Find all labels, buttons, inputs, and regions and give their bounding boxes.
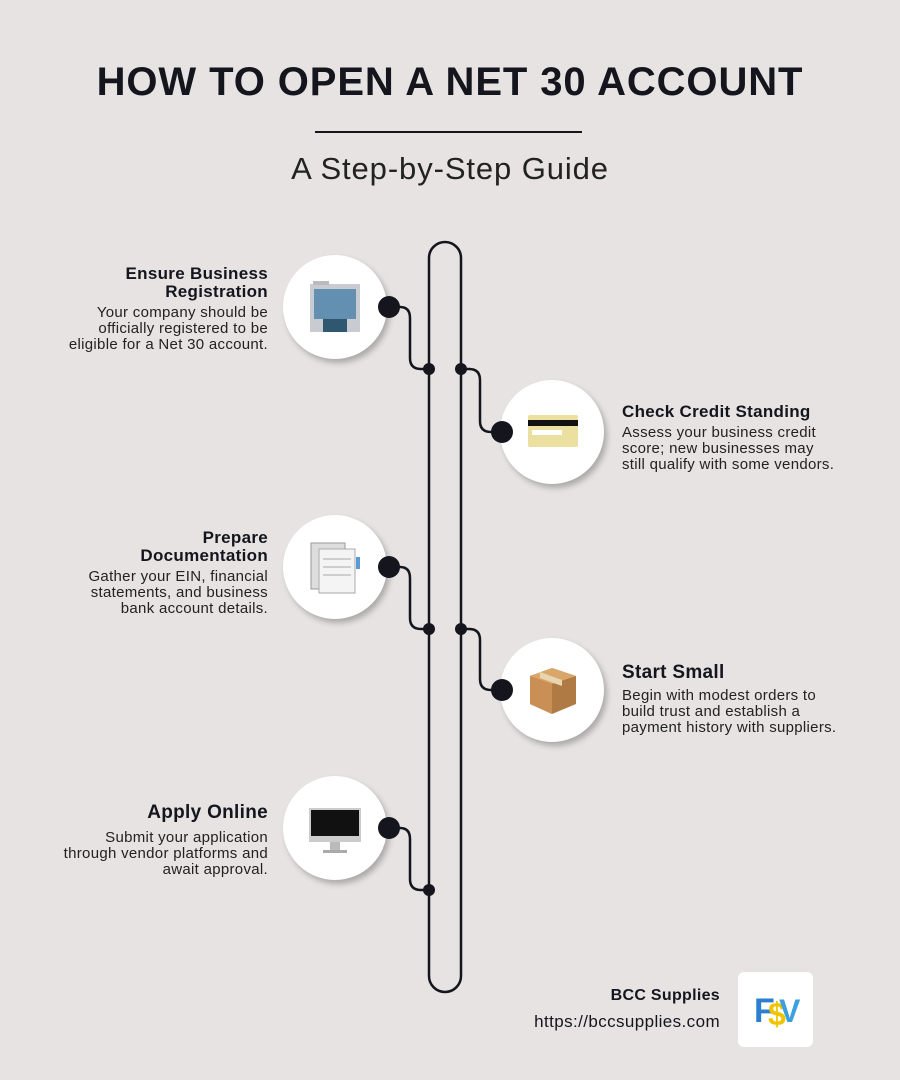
step 3 circle: document icon — [283, 515, 387, 619]
logo: F — [754, 992, 775, 1030]
step 3 dot — [378, 556, 400, 578]
step 3 text: Prepare — [203, 528, 268, 547]
footer brand text: BCC Supplies — [611, 987, 720, 1004]
step 2 circle: credit card icon — [500, 380, 604, 484]
logo: $ — [768, 996, 786, 1032]
step 4 text: Begin with modest orders to build trust and establish a payment history with suppliers. — [622, 687, 836, 736]
step 5 dot — [378, 817, 400, 839]
step 2 text: Check Credit Standing — [622, 402, 811, 421]
footer brand text: https://bccsupplies.com — [534, 1012, 720, 1031]
step 1 text: Registration — [165, 282, 268, 301]
step 4 circle: box icon — [500, 638, 604, 742]
step 3 text: Documentation — [140, 546, 268, 565]
step 2 text: Assess your business credit score; new businesses may still qualify with some vendors. — [622, 424, 834, 473]
step 1 dot — [378, 296, 400, 318]
step 4 text: Start Small — [622, 662, 725, 683]
step 1 text: Your company should be officially registered to be eligible for a Net 30 account. — [69, 304, 268, 353]
title: HOW TO OPEN A NET 30 ACCOUNT — [97, 60, 803, 104]
step 1 text — [69, 264, 268, 353]
step 1 circle: building icon — [283, 255, 387, 359]
step 5 text: Apply Online — [147, 802, 268, 823]
step 1 text: Ensure Business — [126, 264, 268, 283]
footer brand text — [534, 987, 720, 1031]
step 3 text: Gather your EIN, financial statements, and business bank account details. — [88, 568, 268, 617]
step 2 text — [622, 402, 834, 473]
step 5 text: Submit your application through vendor platforms and await approval. — [64, 829, 268, 878]
divider line — [315, 131, 582, 133]
subtitle: A Step-by-Step Guide — [291, 151, 609, 186]
step 5 text — [64, 802, 268, 878]
step 3 text — [88, 528, 268, 617]
logo — [738, 972, 813, 1047]
step 5 circle: monitor icon — [283, 776, 387, 880]
logo: V — [779, 993, 801, 1029]
step 4 text — [622, 662, 836, 736]
step 2 dot — [491, 421, 513, 443]
step 4 dot — [491, 679, 513, 701]
